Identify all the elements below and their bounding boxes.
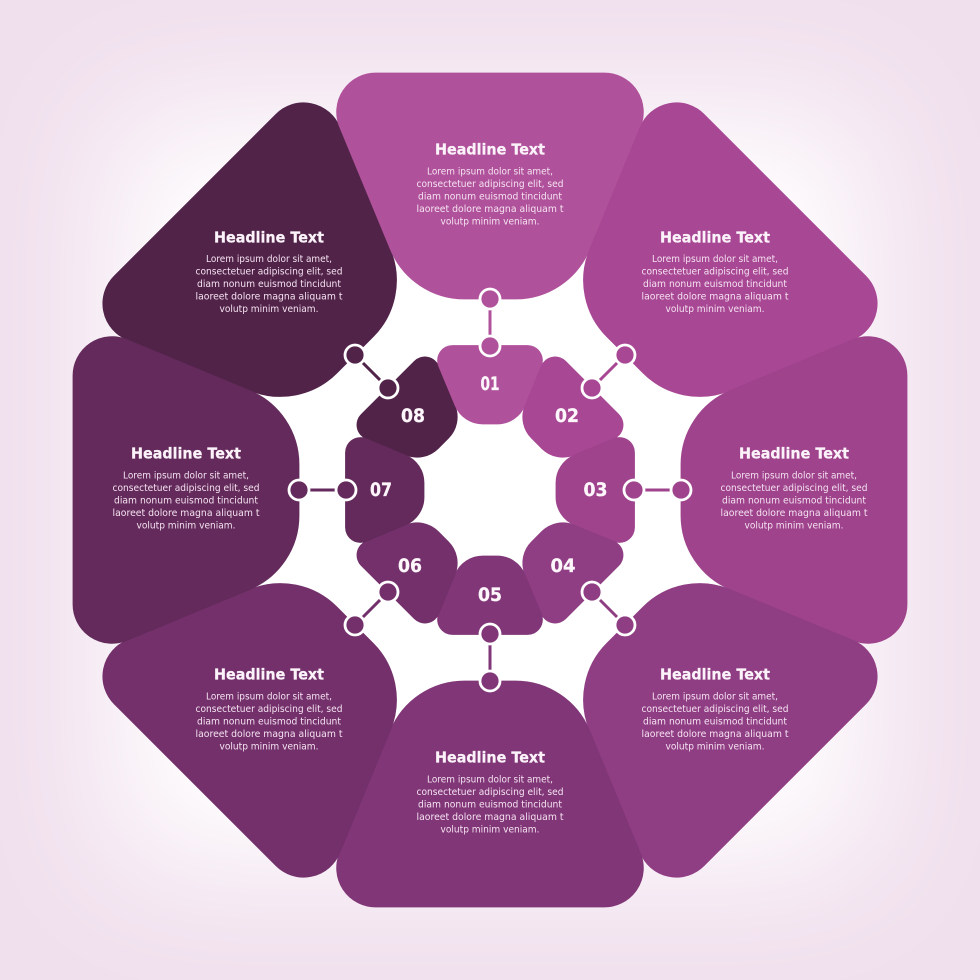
inner segment: 01	[438, 345, 542, 424]
inner segment: 03	[556, 438, 634, 542]
text block: step 01: diam nonum euismod tincidunt	[418, 192, 562, 202]
heading: step 02: Headline Text	[660, 228, 771, 246]
heading: step 06: Headline Text	[214, 666, 325, 684]
inner segment: 02	[500, 351, 629, 480]
inner segment: 01: 01	[480, 373, 500, 395]
text block: step 04: diam nonum euismod tincidunt	[643, 716, 787, 728]
text block: step 06: consectetuer adipiscing elit, sed	[196, 704, 342, 715]
inner segment: 04: 04	[550, 555, 576, 577]
text block: step 07: diam nonum euismod tincidunt	[114, 496, 258, 506]
inner segment: 08: 08	[401, 405, 425, 427]
text block: step 05: consectetuer adipiscing elit, sed	[416, 787, 564, 798]
panel: step 02	[517, 87, 893, 463]
heading: step 08: Headline Text	[214, 228, 325, 246]
inner segment: 02: 02	[555, 405, 579, 427]
text block: step 07: Lorem ipsum dolor sit amet,	[123, 470, 249, 482]
connector: 04	[582, 582, 635, 635]
text block: step 02: diam nonum euismod tincidunt	[643, 279, 787, 290]
heading: step 04: Headline Text	[660, 666, 771, 684]
text block: step 04: consectetuer adipiscing elit, sed	[642, 704, 788, 715]
inner segment: 05	[438, 556, 542, 634]
inner segment: 07: 07	[370, 479, 392, 501]
text block: step 02	[642, 254, 789, 315]
text block: step 03: volutp minim veniam.	[744, 520, 844, 532]
text block: step 02: Lorem ipsum dolor sit amet,	[652, 254, 778, 265]
text block: step 02: laoreet dolore magna aliquam t	[642, 292, 789, 302]
text block: step 08: laoreet dolore magna aliquam t	[196, 292, 343, 302]
inner segment: 05: 05	[478, 584, 502, 606]
inner segment: 03: 03	[584, 479, 608, 501]
text block: step 05	[416, 774, 564, 836]
text block: step 07: consectetuer adipiscing elit, sed	[112, 483, 260, 494]
text block: step 08: Lorem ipsum dolor sit amet,	[206, 254, 332, 265]
panel: step 05	[337, 681, 643, 907]
panel: step 01	[337, 73, 643, 299]
text block: step 01: laoreet dolore magna aliquam t	[416, 204, 564, 215]
inner segment: 04	[500, 500, 629, 629]
text block: step 03	[720, 470, 868, 532]
inner segment: 06	[351, 500, 480, 629]
inner segment: 06: 06	[398, 555, 422, 577]
panel: step 06	[87, 517, 463, 893]
text block: step 08: volutp minim veniam.	[220, 304, 318, 315]
heading: step 05: Headline Text	[435, 748, 546, 766]
connector: 02	[582, 345, 635, 398]
inner segment: 08	[351, 351, 480, 480]
panel: step 03	[681, 337, 907, 643]
connector: 01	[480, 289, 500, 356]
text block: step 03: laoreet dolore magna aliquam t	[720, 508, 868, 519]
text block: step 06	[196, 692, 343, 752]
text block: step 05: Lorem ipsum dolor sit amet,	[427, 774, 553, 786]
heading: step 03: Headline Text	[739, 444, 850, 462]
text block: step 08: diam nonum euismod tincidunt	[197, 279, 341, 290]
text block: step 06: Lorem ipsum dolor sit amet,	[206, 692, 332, 702]
text block: step 03: consectetuer adipiscing elit, sed	[720, 483, 868, 494]
text block: step 01	[416, 166, 564, 228]
text block: step 08: consectetuer adipiscing elit, sed	[196, 266, 342, 278]
text block: step 06: volutp minim veniam.	[220, 742, 318, 752]
connector: 08	[345, 345, 398, 398]
text block: step 02: volutp minim veniam.	[666, 304, 764, 315]
text block: step 05: volutp minim veniam.	[440, 824, 540, 836]
text block: step 07: laoreet dolore magna aliquam t	[112, 508, 260, 519]
panel: step 07	[73, 337, 299, 643]
connector: 03	[624, 480, 691, 500]
panel: step 04	[517, 517, 893, 893]
text block: step 04: laoreet dolore magna aliquam t	[642, 729, 789, 740]
text block: step 08	[196, 254, 343, 315]
text block: step 04	[642, 692, 789, 752]
connector: 07	[289, 480, 356, 500]
text block: step 05: diam nonum euismod tincidunt	[418, 800, 562, 810]
heading: step 01: Headline Text	[435, 140, 546, 158]
text block: step 06: diam nonum euismod tincidunt	[197, 716, 341, 728]
text block: step 04: Lorem ipsum dolor sit amet,	[652, 692, 778, 702]
text block: step 04: volutp minim veniam.	[666, 742, 764, 752]
text block: step 07	[112, 470, 260, 532]
text block: step 03: Lorem ipsum dolor sit amet,	[731, 470, 857, 482]
connector: 06	[345, 582, 398, 635]
panel: step 08	[87, 87, 463, 463]
text block: step 01: Lorem ipsum dolor sit amet,	[427, 166, 553, 178]
inner segment: 07	[345, 438, 424, 542]
text block: step 01: consectetuer adipiscing elit, sed	[416, 179, 564, 190]
text block: step 02: consectetuer adipiscing elit, sed	[642, 266, 788, 278]
text block: step 05: laoreet dolore magna aliquam t	[416, 812, 564, 823]
connector: 05	[480, 624, 500, 691]
heading: step 07: Headline Text	[131, 444, 242, 462]
text block: step 07: volutp minim veniam.	[136, 520, 236, 532]
text block: step 01: volutp minim veniam.	[440, 216, 540, 228]
text block: step 06: laoreet dolore magna aliquam t	[196, 729, 343, 740]
text block: step 03: diam nonum euismod tincidunt	[722, 496, 866, 506]
